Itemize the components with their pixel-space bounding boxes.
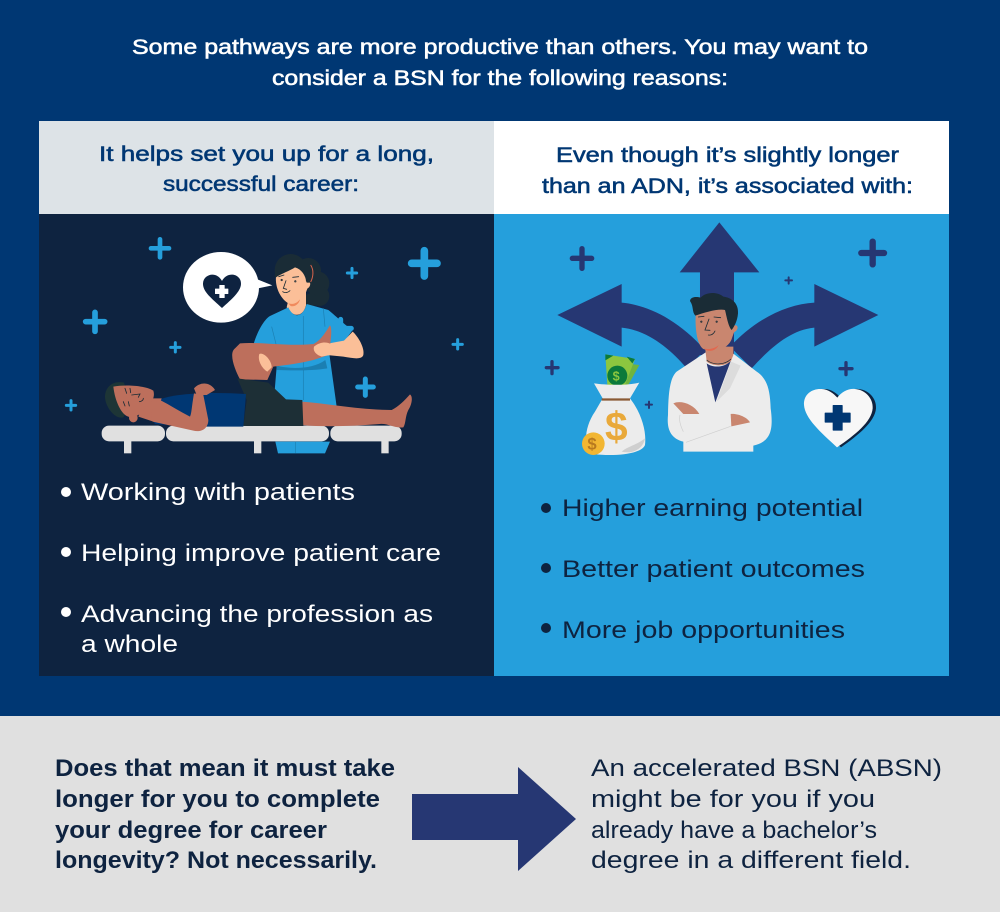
question text: longer for you to complete [55, 786, 380, 813]
money bag: $ [613, 369, 620, 383]
doctor neck [705, 347, 733, 365]
patient hand on knee [259, 354, 272, 372]
therapist features [279, 275, 299, 293]
doctor coat [668, 352, 772, 452]
answer text: already have a bachelor’s [591, 817, 877, 844]
therapist uniform [253, 304, 353, 407]
illustration: doctor at crossroads [546, 222, 884, 455]
career panel body [39, 214, 494, 676]
question text: longevity? Not necessarily. [55, 847, 377, 874]
patient arm [152, 393, 208, 431]
therapist face [276, 266, 310, 304]
money bag [582, 354, 645, 455]
doctor [668, 293, 772, 452]
doctor face lines [698, 316, 721, 335]
question text: your degree for career [55, 817, 327, 844]
patient raised leg [232, 325, 331, 380]
title: Some pathways are more productive than others. You may want to [132, 36, 868, 59]
money bag: $ [587, 435, 597, 454]
bullet list: career: Helping improve patient care [81, 540, 441, 567]
benefits panel heading [494, 121, 949, 214]
answer text: degree in a different field. [591, 847, 911, 874]
question text: Does that mean it must take [55, 755, 395, 782]
question text [55, 755, 395, 874]
patient features [123, 388, 143, 406]
doctor hair [690, 293, 738, 330]
therapist hair back [275, 254, 329, 307]
illustration: therapist stretching patient leg [66, 239, 462, 453]
plus signs [546, 242, 884, 408]
panel: career [39, 121, 494, 676]
arrow [412, 767, 576, 871]
banknotes [610, 362, 639, 387]
money bag: $ [605, 404, 628, 450]
therapist arm [320, 332, 364, 358]
panel: associated benefits [494, 121, 949, 676]
patient torso [152, 393, 246, 427]
answer text: An accelerated BSN (ABSN) [591, 755, 942, 782]
title: consider a BSN for the following reasons: [272, 67, 728, 90]
bullet list: career: Advancing the profession as [81, 601, 433, 628]
answer text [591, 755, 942, 874]
bullet list: benefits: Higher earning potential [562, 495, 863, 522]
bag [586, 383, 645, 455]
benefits panel heading: than an ADN, it’s associated with: [542, 175, 913, 198]
patient head [105, 382, 127, 418]
bullet list: career: Working with patients [81, 479, 355, 506]
coin [582, 432, 605, 455]
title [132, 36, 868, 90]
patient shorts [237, 378, 303, 426]
benefits panel body [494, 214, 949, 676]
heart with cross [804, 389, 876, 447]
therapist hand [314, 342, 331, 357]
bullet list: benefits [541, 495, 865, 644]
patient neck [138, 398, 162, 422]
doctor shirt [707, 360, 731, 402]
plus signs [66, 239, 462, 410]
career panel heading: It helps set you up for a long, [99, 143, 434, 166]
therapist neck [287, 290, 306, 315]
patient lower leg and foot [302, 394, 412, 427]
bullet list: benefits: Better patient outcomes [562, 556, 865, 583]
therapist hair front [275, 260, 312, 283]
three-way arrows [680, 222, 759, 355]
table [102, 426, 402, 453]
career panel heading [39, 121, 494, 214]
bottom band [0, 716, 1000, 912]
doctor lapel [717, 362, 741, 402]
therapist lower uniform [275, 442, 330, 453]
answer text: might be for you if you [591, 786, 875, 813]
bullet list: career [61, 479, 441, 658]
doctor arms [674, 401, 750, 442]
benefits panel heading: Even though it’s slightly longer [556, 144, 899, 167]
bullet list: career: a whole [81, 631, 178, 658]
bullet list: benefits: More job opportunities [562, 617, 845, 644]
speech bubble with heart [183, 252, 272, 323]
career panel heading: successful career: [163, 173, 359, 196]
doctor face [696, 308, 738, 351]
